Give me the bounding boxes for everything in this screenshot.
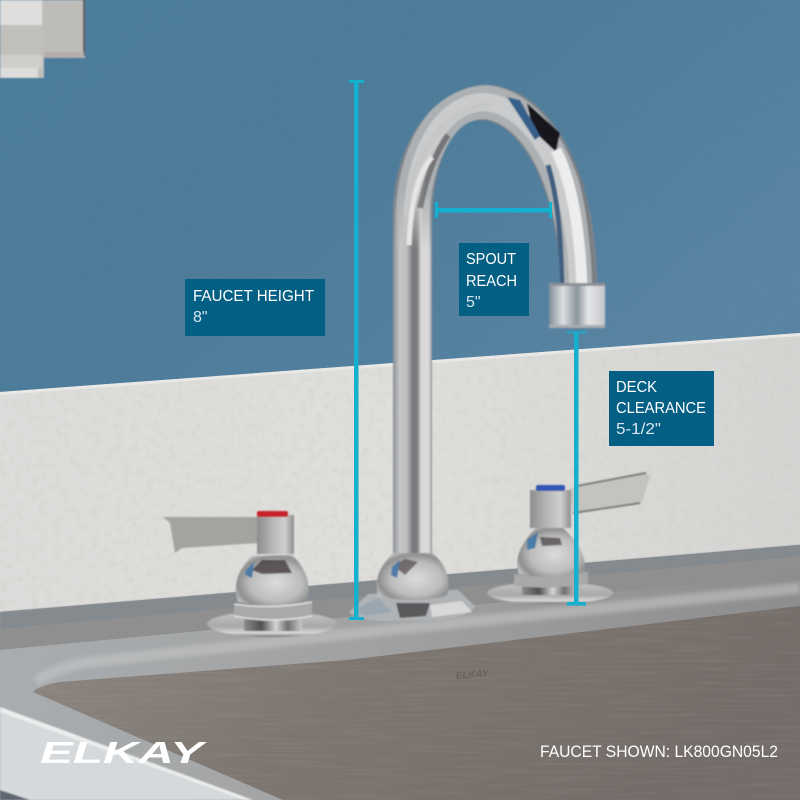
background: blue wall (0, 0, 800, 400)
callout: faucet height: FAUCET HEIGHT (193, 288, 314, 305)
wall-mounted fixture at top left (0, 0, 85, 78)
blue cold indicator (536, 485, 565, 491)
centre base of faucet (349, 553, 475, 621)
callout: deck clearance (609, 371, 714, 446)
callout: faucet height (185, 279, 325, 336)
stainless basin (0, 588, 800, 800)
callout: deck clearance: CLEARANCE (616, 400, 706, 417)
measurement line: deck clearance (567, 331, 586, 606)
logo: Elkay: ELKAY (40, 735, 208, 770)
base plate (207, 611, 337, 637)
lever (570, 473, 650, 513)
left handle (163, 511, 337, 637)
callout: spout reach: SPOUT (466, 251, 516, 268)
callout: deck clearance: DECK (616, 379, 657, 396)
lever (163, 517, 258, 553)
callout: spout reach (459, 243, 529, 316)
sink rim (0, 574, 800, 800)
backsplash (0, 330, 800, 620)
measurement line: faucet height (349, 80, 364, 620)
model caption: FAUCET SHOWN: LK800GN05L2 (540, 743, 778, 761)
callout: faucet height: 8" (193, 309, 208, 326)
measurement line: spout reach (435, 202, 552, 218)
base plate (487, 582, 613, 604)
faucet spout (393, 97, 605, 560)
callout: spout reach: REACH (466, 273, 517, 290)
callout: spout reach: 5" (466, 294, 481, 311)
callout: deck clearance: 5-1/2" (616, 421, 661, 438)
red hot indicator (257, 511, 288, 517)
right handle (487, 473, 650, 604)
faint logo stamped in basin: ELKAY (455, 668, 491, 682)
front rim of the sink (0, 707, 253, 800)
sink deck (0, 545, 800, 800)
